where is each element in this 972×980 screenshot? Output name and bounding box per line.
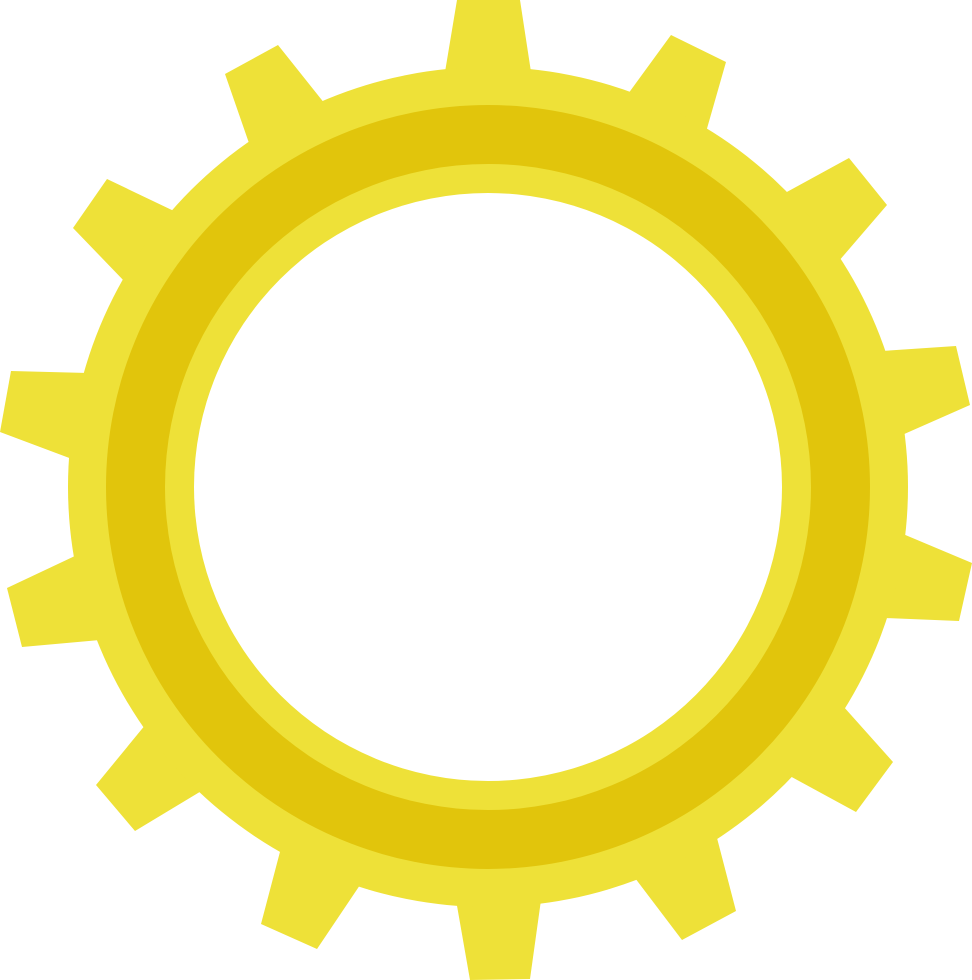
dark ring	[106, 105, 870, 869]
center hole	[194, 193, 782, 781]
gear body	[68, 67, 908, 907]
inner light ring	[165, 164, 811, 810]
